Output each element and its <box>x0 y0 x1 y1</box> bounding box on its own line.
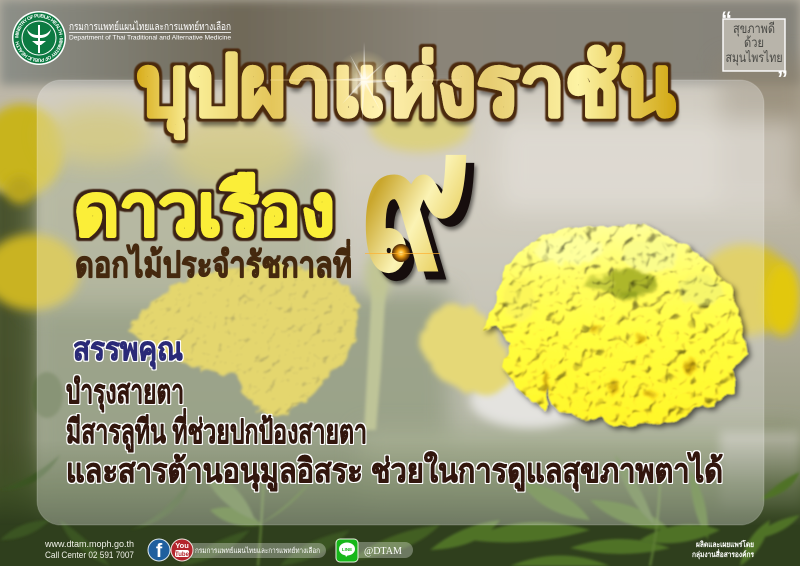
line id <box>350 542 413 558</box>
icon: youtube: Tube <box>175 552 190 558</box>
flower name: ดาวเรือง <box>74 171 335 251</box>
footer contact: www.dtam.moph.go.th <box>44 539 134 549</box>
badge: healthy with Thai herbs <box>721 7 788 91</box>
heading: benefits: สรรพคุณ <box>73 331 183 370</box>
marigold flower <box>482 222 754 434</box>
footer credit: ผลิตและเผยแพร่โดย <box>696 539 754 549</box>
social pill: department page <box>185 543 326 558</box>
footer credit: กลุ่มงานสื่อสารองค์กร <box>692 548 755 560</box>
benefits text <box>66 373 723 492</box>
badge: healthy with Thai herbs: สมุนไพรไทย <box>726 50 782 66</box>
header: department name: กรมการแพทย์แผนไทยและการแพทย์ทางเลือก <box>69 20 231 33</box>
badge: healthy with Thai herbs: สุขภาพดี <box>733 21 775 37</box>
badge: healthy with Thai herbs: “ <box>721 7 732 32</box>
badge: healthy with Thai herbs: ” <box>777 66 788 91</box>
panel <box>37 80 764 525</box>
logo: Ministry of Public Health: MINISTRY OF PUBLIC HEALTH · MINISTRY OF PUBLIC HEALTH <box>15 14 63 62</box>
icon: youtube <box>171 539 193 561</box>
icon: facebook: f <box>156 541 163 562</box>
icon: facebook <box>148 539 170 562</box>
icon: line: LINE <box>342 547 352 552</box>
header: department name: Department of Thai Traditional and Alternative Medicine <box>69 34 231 42</box>
social pill: department page: กรมการแพทย์แผนไทยและการแพทย์ทางเลือก <box>195 546 320 555</box>
benefits text: บำรุงสายตา <box>66 373 184 413</box>
icon: line <box>336 539 358 562</box>
title sparkle <box>270 42 460 122</box>
line id: @DTAM <box>364 546 402 557</box>
icon: youtube: You <box>175 541 189 550</box>
footer contact: Call Center 02 591 7007 <box>45 550 134 560</box>
header: department name <box>69 20 231 42</box>
footer contact <box>44 539 134 560</box>
subtitle: ดอกไม้ประจำรัชกาลที่ <box>75 239 352 285</box>
benefits text: และสารต้านอนุมูลอิสระ ช่วยในการดูแลสุขภาพตาได้ <box>66 451 723 492</box>
benefits text: มีสารลูทีน ที่ช่วยปกป้องสายตา <box>66 408 367 453</box>
footer credit <box>692 539 755 560</box>
badge: healthy with Thai herbs: ด้วย <box>744 35 764 50</box>
numeral 9: ๙ <box>368 99 478 317</box>
title: บุปผาแห่งราชัน <box>137 39 675 139</box>
foreground leaves <box>0 455 800 566</box>
numeral 9: ๙ <box>360 91 470 309</box>
